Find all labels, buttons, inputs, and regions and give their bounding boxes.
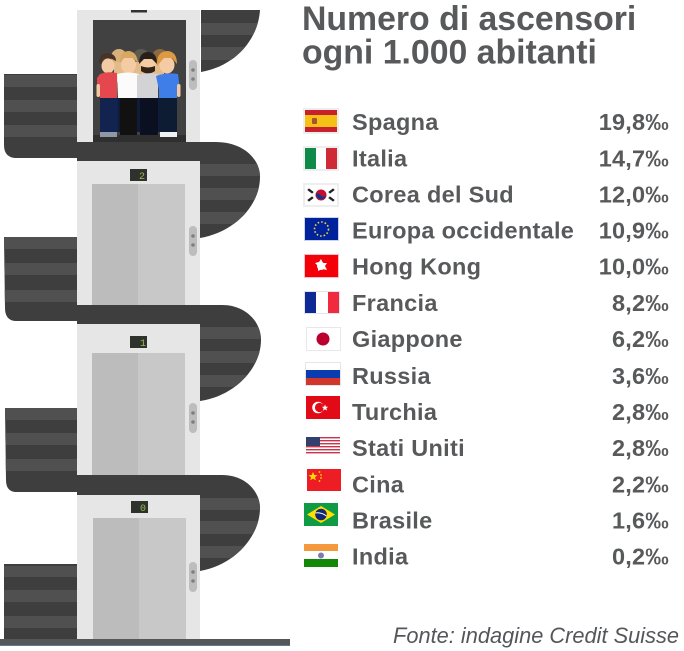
flag: Spain — [303, 108, 339, 134]
row: Giappone: Giappone — [352, 326, 463, 352]
elevator shaft belt: lower section — [0, 404, 264, 574]
row: Francia: 8,2‰ — [612, 290, 669, 316]
row: Russia: 3,6‰ — [612, 363, 669, 389]
row: Europa occidentale: Europa occidentale — [352, 218, 574, 244]
flag: Turkey — [306, 396, 340, 419]
title — [302, 0, 636, 72]
flag: Italy — [303, 146, 339, 171]
elevator shaft belt: bottom block — [4, 564, 77, 640]
row: Spagna — [303, 108, 669, 135]
elevator: floor 1 — [77, 324, 200, 475]
row: Brasile — [304, 503, 669, 534]
row: Europa occidentale — [304, 217, 669, 244]
flag: South Korea — [303, 183, 339, 207]
row: Francia: Francia — [352, 290, 438, 316]
elevator: floor 0: 0 — [140, 504, 146, 515]
person: white shirt — [117, 51, 139, 135]
row: Hong Kong — [304, 254, 669, 280]
flag: China — [307, 469, 341, 491]
row: Hong Kong: Hong Kong — [352, 254, 481, 280]
person: blue shirt — [156, 51, 180, 137]
row: Cina: 2,2‰ — [612, 472, 669, 498]
row: Turchia — [306, 396, 669, 425]
row: Spagna: Spagna — [352, 109, 439, 135]
row: Brasile: Brasile — [352, 508, 432, 534]
row: Spagna: 19,8‰ — [599, 109, 669, 135]
row: India: 0,2‰ — [612, 544, 669, 570]
row: Italia: 14,7‰ — [599, 146, 669, 172]
elevator shaft belt: middle section — [0, 233, 264, 405]
row: Russia: Russia — [352, 363, 431, 389]
row: Brasile: 1,6‰ — [612, 508, 669, 534]
elevator: open car with people — [77, 10, 200, 142]
row: Giappone: 6,2‰ — [612, 326, 669, 352]
row: Hong Kong: 10,0‰ — [599, 254, 669, 280]
row: Corea del Sud: 12,0‰ — [599, 182, 669, 208]
flag: Russia — [305, 362, 341, 386]
flag: Hong Kong — [304, 254, 339, 278]
elevator: floor 0 — [77, 495, 200, 640]
flag: EU — [304, 217, 339, 241]
elevator shaft belt: upper section — [0, 70, 264, 242]
row: Turchia: 2,8‰ — [612, 399, 669, 425]
row: India — [304, 544, 669, 570]
flag: France — [304, 291, 340, 314]
row: Corea del Sud — [303, 182, 669, 208]
row: Italia — [303, 146, 669, 172]
row: Europa occidentale: 10,9‰ — [599, 218, 669, 244]
row: Italia: Italia — [352, 146, 408, 172]
row: Corea del Sud: Corea del Sud — [352, 182, 514, 208]
flag: Japan — [306, 327, 341, 351]
ground line — [0, 639, 290, 646]
row: Stati Uniti: 2,8‰ — [612, 435, 669, 461]
title: Numero di ascensori — [302, 0, 636, 38]
row: Turchia: Turchia — [352, 399, 438, 425]
row: Stati Uniti — [306, 435, 669, 461]
row: India: India — [352, 544, 409, 570]
title: ogni 1.000 abitanti — [302, 34, 597, 72]
person: grey shirt with beard — [137, 52, 158, 135]
elevator: floor 1: 1 — [140, 339, 146, 350]
row: Cina: Cina — [352, 472, 405, 498]
row: Giappone — [306, 326, 669, 352]
elevator: floor 2 — [77, 161, 200, 305]
source note: Fonte: indagine Credit Suisse — [393, 623, 679, 648]
flag: India — [304, 544, 338, 567]
people group — [96, 49, 180, 137]
row: Russia — [305, 362, 669, 389]
elevator: floor 2: 2 — [139, 172, 145, 183]
flag: Brazil — [304, 503, 338, 526]
person: red shirt — [96, 53, 118, 137]
row: Stati Uniti: Stati Uniti — [352, 435, 465, 461]
row: Francia — [304, 290, 669, 316]
flag: USA — [306, 437, 340, 455]
row: Cina — [307, 469, 669, 498]
elevator shaft belt: top lobe — [200, 10, 262, 74]
